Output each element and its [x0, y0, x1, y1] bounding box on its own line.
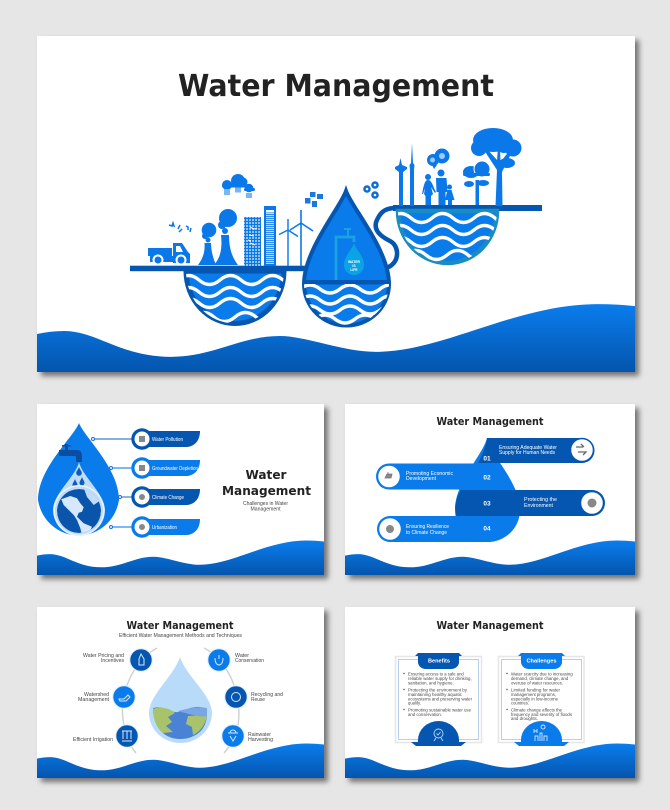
benefits list: and conservation.	[408, 712, 442, 717]
drop: water is life	[344, 243, 364, 275]
wave: main slide	[37, 304, 635, 372]
cooling towers with smoke	[198, 209, 238, 265]
left platform and bowl	[130, 266, 305, 323]
benefits list: quality.	[408, 701, 421, 706]
benefits list: Ensuring access to a safe and	[408, 672, 464, 676]
challenges list: overuse of water resources.	[511, 680, 563, 686]
method labels: Reuse	[251, 697, 265, 703]
wave	[345, 540, 635, 575]
globe	[153, 707, 207, 739]
large tree	[471, 128, 522, 206]
band labels: to Climate Change	[406, 530, 447, 536]
data squares	[305, 192, 323, 207]
subheading: Efficient Water Management Methods and Techniques	[119, 633, 243, 639]
gray arcs	[122, 648, 239, 753]
drop: water is life: IS	[352, 264, 356, 268]
benefits list: maintaining healthy aquatic	[408, 692, 463, 697]
item: groundwater depletion: Groundwater Depletion	[152, 466, 198, 472]
heading block: Challenges in Water	[243, 501, 288, 507]
band labels: Environment	[524, 503, 554, 509]
connector dots	[92, 438, 122, 528]
panel: challenges in water management	[37, 404, 324, 575]
panel: main title slide	[37, 36, 635, 372]
birds	[169, 223, 191, 232]
band labels: Ensuring Resilience	[406, 524, 449, 530]
inner teardrop	[53, 462, 105, 536]
globe	[57, 489, 101, 533]
tab: Benefits	[428, 658, 450, 664]
challenges list	[506, 672, 573, 721]
method labels: Water	[235, 653, 249, 659]
central water drop	[300, 191, 400, 326]
band labels: Promoting Economic	[406, 471, 453, 477]
tap icon	[59, 444, 82, 462]
method labels: Harvesting	[248, 737, 273, 743]
method labels: Management	[78, 697, 110, 703]
tap	[336, 237, 354, 280]
challenges list: Limited funding for water	[511, 688, 561, 692]
step numbers: 04	[483, 526, 491, 532]
challenges list: frequency and severity of floods	[511, 712, 573, 717]
challenges list: management programs,	[511, 692, 556, 697]
step numbers: 03	[483, 500, 491, 508]
method labels: Water Pricing and	[83, 653, 124, 659]
drop: water is life: WATER	[348, 260, 361, 264]
challenges list: especially in low-income	[511, 696, 559, 701]
heading: Water Management	[436, 416, 544, 428]
method nodes	[113, 649, 247, 747]
city towers	[395, 143, 414, 206]
illustration: water cycle	[130, 128, 542, 326]
method labels: Incentives	[101, 658, 125, 664]
card: benefits	[396, 653, 482, 746]
heading block	[222, 467, 311, 512]
band labels: Development	[406, 476, 437, 482]
benefits list: ecosystems and preserving water	[408, 696, 473, 701]
card: challenges	[498, 653, 584, 746]
drop: water is life: LIFE	[350, 268, 358, 272]
method labels: Watershed	[84, 692, 109, 698]
heading block: Management	[250, 506, 281, 512]
water droplets	[72, 467, 84, 488]
band 02	[376, 464, 490, 490]
wave	[37, 540, 324, 575]
connector pipe	[376, 208, 397, 268]
wave	[345, 743, 635, 778]
right platform and bowl	[390, 205, 542, 263]
step numbers: 01	[483, 456, 491, 462]
connectors	[93, 439, 135, 527]
title: Water Management	[178, 69, 494, 104]
item: groundwater depletion	[131, 457, 200, 479]
dome with award icon	[411, 721, 466, 746]
method labels: Rainwater	[248, 732, 271, 738]
benefits list: Promoting sustainable water use	[408, 708, 472, 712]
item: climate change	[131, 486, 200, 508]
item: urbanization	[131, 516, 200, 538]
family silhouettes	[422, 170, 454, 205]
node icons	[378, 438, 604, 540]
item: water pollution: Water Pollution	[152, 437, 183, 443]
benefits list	[403, 672, 473, 717]
tab: Challenges	[526, 658, 556, 664]
drop with globe	[38, 423, 119, 536]
item: water pollution	[131, 428, 200, 450]
band labels: Ensuring Adequate Water	[499, 445, 557, 451]
step numbers: 02	[483, 474, 491, 482]
item: urbanization: Urbanization	[152, 525, 177, 531]
item: climate change: Climate Change	[152, 495, 184, 501]
drop with globe	[149, 657, 212, 743]
benefits list: Protecting the environment by	[408, 688, 468, 692]
challenges list: countries.	[511, 701, 529, 706]
gears	[363, 181, 379, 199]
wind turbines	[279, 210, 313, 266]
method labels	[73, 653, 283, 743]
band labels	[406, 445, 557, 536]
band 04	[377, 516, 490, 542]
speech bubbles	[427, 148, 450, 169]
challenges list: Water scarcity due to increasing	[511, 672, 573, 676]
challenges list: Climate change affects the	[511, 708, 563, 712]
central drop	[455, 438, 520, 542]
clouds	[222, 174, 255, 198]
panel: four goals	[345, 404, 635, 575]
benefits list: reliable water supply for drinking,	[408, 676, 472, 681]
heading block: Management	[222, 483, 311, 498]
benefits list: sanitation, and hygiene.	[408, 680, 454, 686]
method labels: Efficient Irrigation	[73, 737, 113, 743]
band labels: Protecting the	[524, 497, 557, 503]
wave	[37, 743, 324, 778]
panel: benefits and challenges	[345, 607, 635, 778]
band 01	[478, 438, 594, 463]
step numbers	[483, 456, 491, 532]
heading: Water Management	[436, 620, 544, 632]
heading block: Water	[246, 467, 287, 482]
panel: efficient methods	[37, 607, 324, 778]
skyscrapers	[244, 206, 276, 266]
dome with city icon	[514, 721, 569, 746]
truck icon	[148, 243, 190, 266]
challenges list: and droughts.	[511, 716, 538, 721]
method labels: Recycling and	[251, 692, 283, 698]
small tree	[463, 161, 490, 205]
band labels: Supply for Human Needs	[499, 450, 555, 456]
trees	[463, 128, 522, 206]
method icons	[119, 654, 240, 741]
challenges list: demand, climate change, and	[511, 676, 569, 681]
heading: Water Management	[126, 620, 234, 632]
method labels: Conservation	[235, 658, 264, 664]
band 03	[455, 490, 605, 516]
